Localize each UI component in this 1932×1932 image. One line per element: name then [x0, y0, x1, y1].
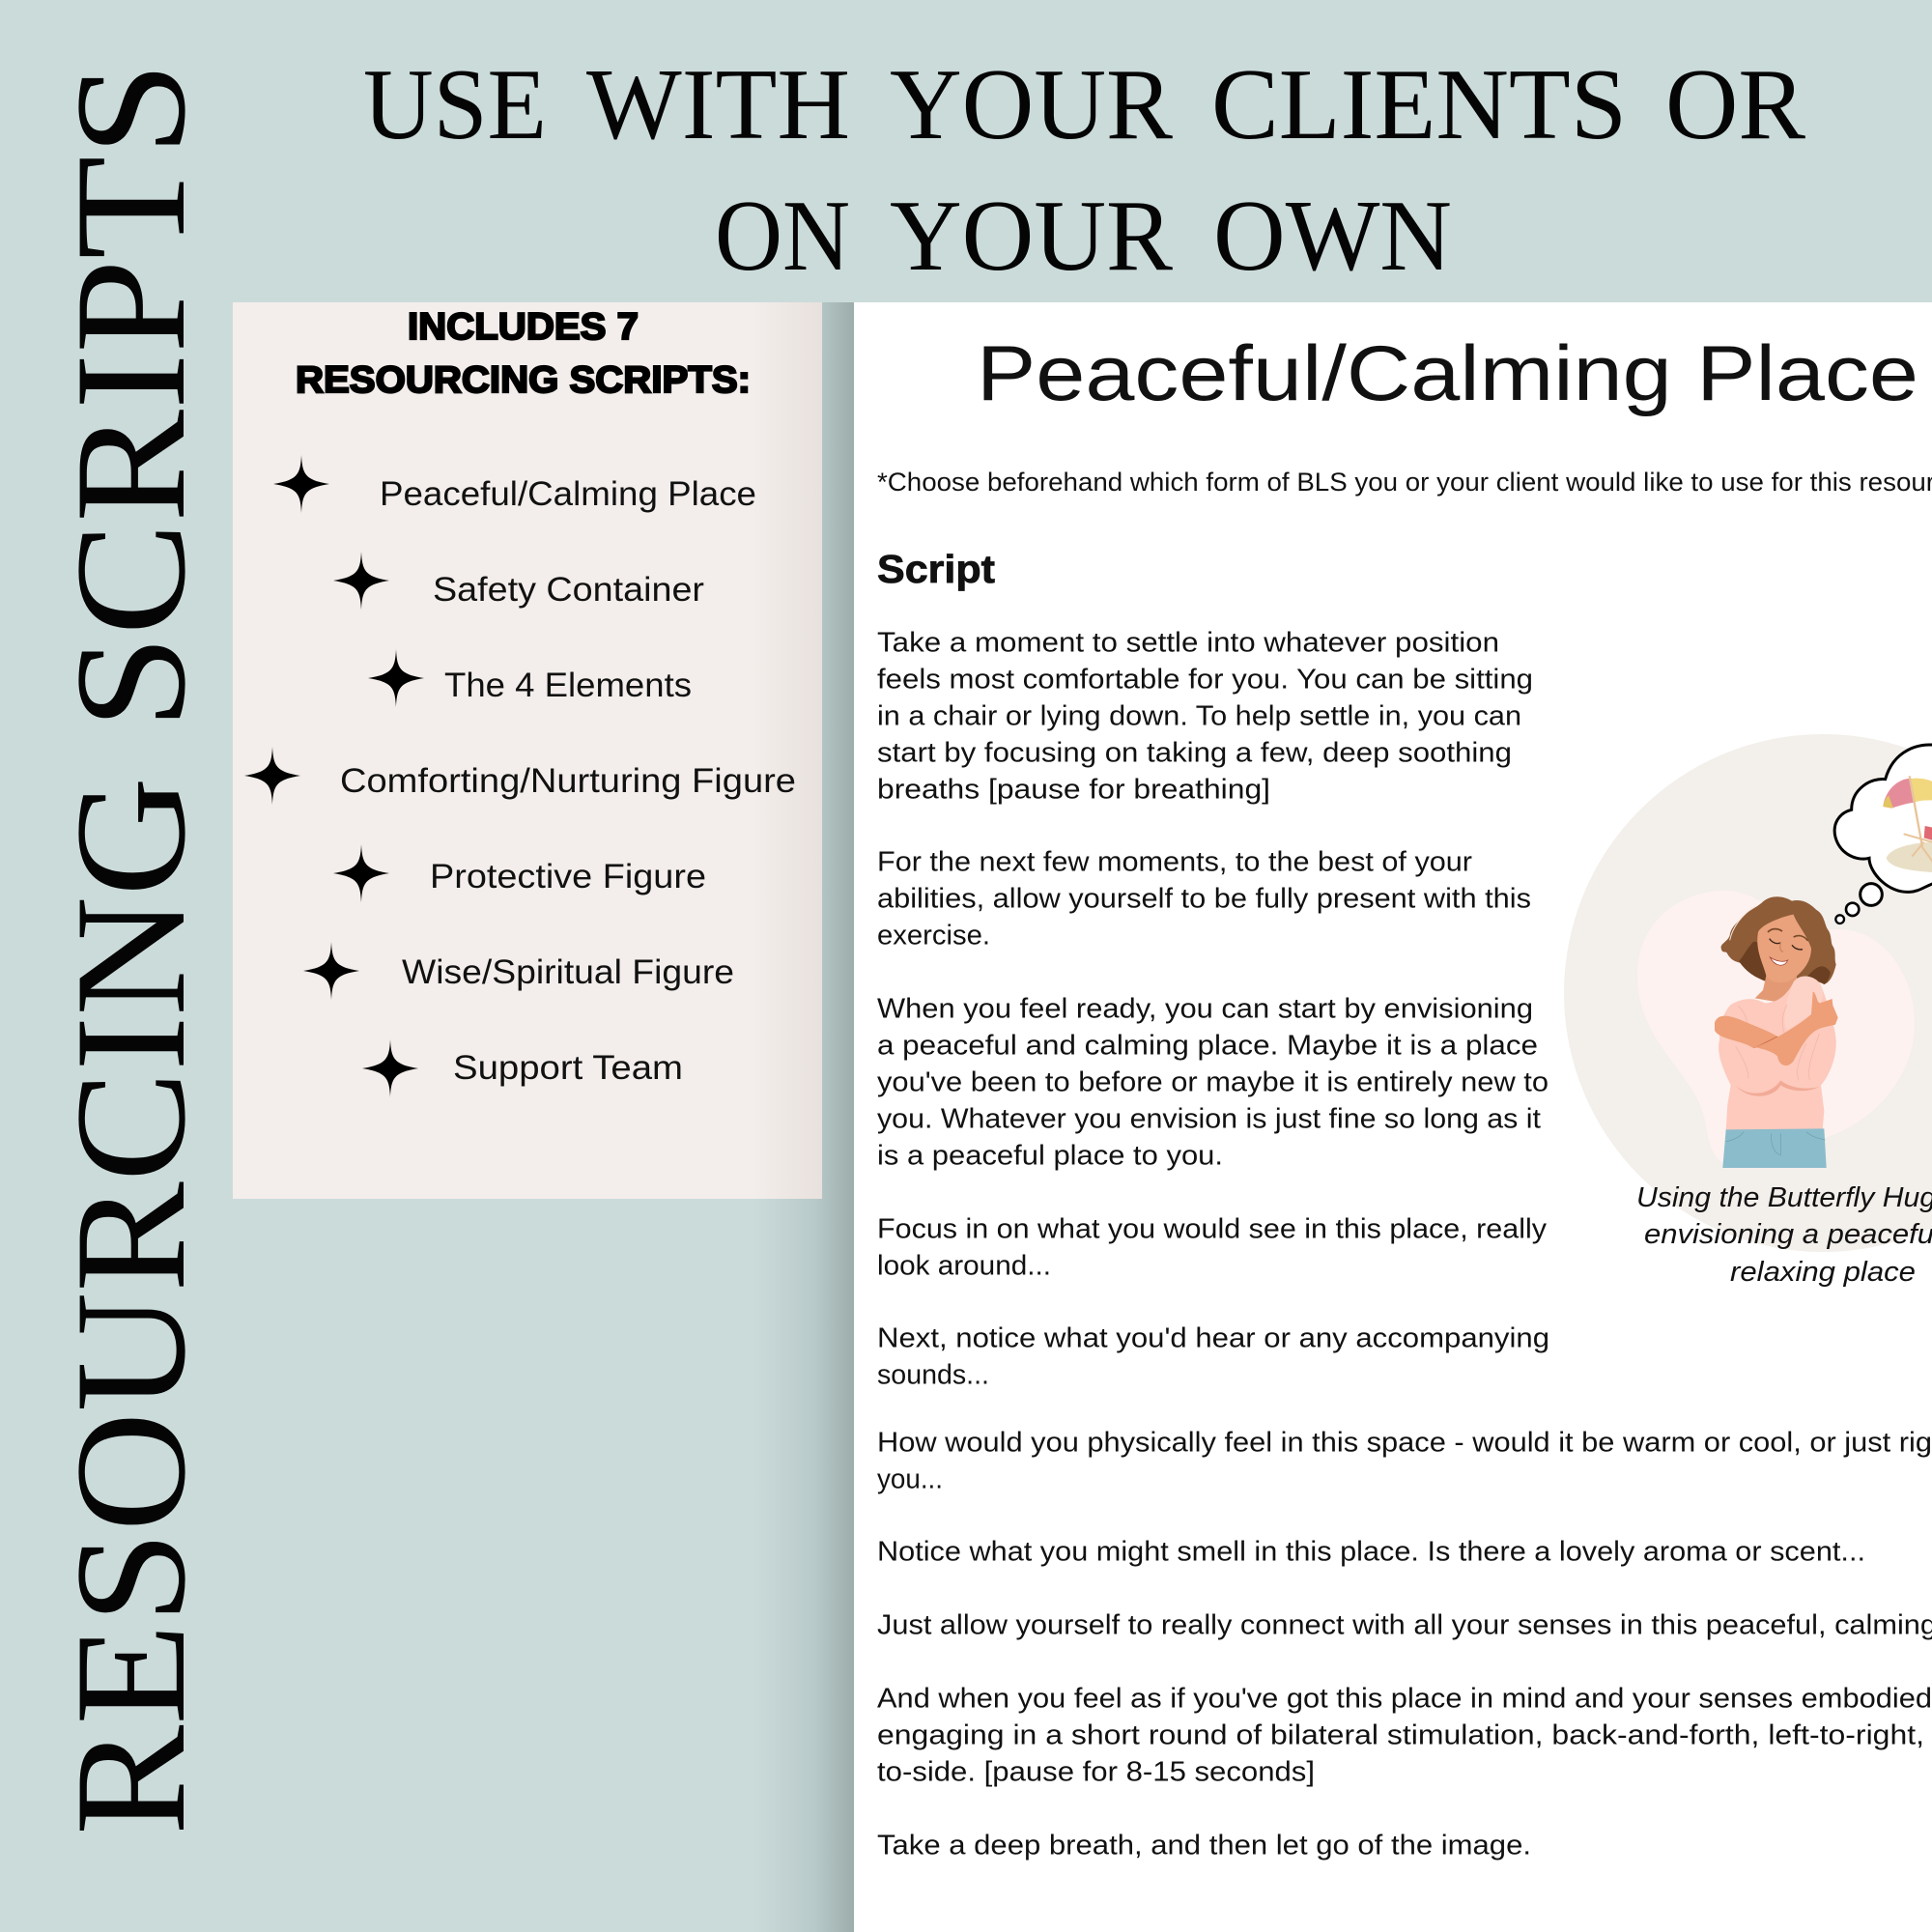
script text: you've been to before or maybe it is entirely new to [877, 1066, 1548, 1097]
script text: start by focusing on taking a few, deep soothing [877, 737, 1512, 768]
script text: in a chair or lying down. To help settle in, you can [877, 700, 1521, 731]
panel heading [296, 306, 751, 401]
backdrop circle [1564, 734, 1932, 1252]
pink blob [1637, 891, 1915, 1167]
script heading: Script [877, 547, 995, 591]
script text: you... [877, 1463, 943, 1494]
woman hugging herself [1715, 896, 1838, 1168]
panel heading: RESOURCING SCRIPTS: [296, 359, 751, 401]
script text: to-side. [pause for 8-15 seconds] [877, 1756, 1315, 1787]
script text: Focus in on what you would see in this place, really [877, 1213, 1548, 1244]
image caption: Using the Butterfly Hug [1636, 1182, 1932, 1213]
list of scripts: Safety Container [433, 571, 704, 609]
headline: YOUR [890, 47, 1173, 160]
script text [877, 627, 1932, 1861]
list of scripts: The 4 Elements [444, 667, 692, 704]
script text: abilities, allow yourself to be fully present with this [877, 883, 1531, 914]
list of scripts: Peaceful/Calming Place [380, 475, 756, 513]
list of scripts [244, 455, 796, 1097]
script text: look around... [877, 1250, 1051, 1281]
icon: star 2 [333, 552, 389, 610]
image caption: envisioning a peacefu [1644, 1219, 1932, 1250]
list of scripts: Protective Figure [430, 858, 706, 895]
script text: Next, notice what you'd hear or any accompanying [877, 1322, 1549, 1353]
headline: CLIENTS [1211, 47, 1627, 160]
list of scripts: Comforting/Nurturing Figure [340, 762, 796, 800]
script text: How would you physically feel in this space - would it be warm or cool, or just rig [877, 1427, 1932, 1458]
headline: WITH [586, 47, 850, 160]
headline: ON [715, 179, 850, 292]
script text: a peaceful and calming place. Maybe it is a place [877, 1030, 1538, 1061]
page drop shadow [753, 302, 854, 1932]
panel: includes 7 resourcing scripts [233, 302, 822, 1199]
headline: OWN [1213, 179, 1452, 292]
headline: USE [363, 47, 547, 160]
icon: star 4 [244, 747, 300, 805]
script text: engaging in a short round of bilateral stimulation, back-and-forth, left-to-right, [877, 1719, 1924, 1750]
icon: star 7 [362, 1039, 418, 1097]
script text: sounds... [877, 1359, 989, 1390]
panel heading: INCLUDES 7 [408, 306, 639, 348]
script text: is a peaceful place to you. [877, 1140, 1223, 1171]
headline: YOUR [890, 179, 1173, 292]
instruction note: *Choose beforehand which form of BLS you or your client would like to use for this resour [877, 468, 1932, 497]
script text: Take a deep breath, and then let go of the image. [877, 1830, 1531, 1861]
icon: star 6 [303, 942, 359, 1000]
script text: exercise. [877, 920, 990, 951]
script text: Just allow yourself to really connect with all your senses in this peaceful, calming [877, 1609, 1932, 1640]
list of scripts: Wise/Spiritual Figure [402, 953, 734, 991]
thought bubble [1834, 745, 1932, 923]
vertical title [43, 62, 218, 1835]
script text: Notice what you might smell in this place. Is there a lovely aroma or scent... [877, 1536, 1865, 1567]
icon: star 3 [368, 649, 424, 707]
list of scripts: Support Team [453, 1049, 683, 1087]
script text: Take a moment to settle into whatever position [877, 627, 1499, 658]
image caption [1636, 1182, 1932, 1288]
script text: When you feel ready, you can start by envisioning [877, 993, 1533, 1024]
script text: And when you feel as if you've got this place in mind and your senses embodied [877, 1683, 1932, 1714]
page title: Peaceful/Calming Place [977, 330, 1918, 417]
vertical title: RESOURCING [43, 777, 218, 1835]
headline: OR [1665, 47, 1805, 160]
script text: For the next few moments, to the best of your [877, 846, 1472, 877]
icon: star 1 [273, 455, 329, 513]
vertical title: SCRIPTS [43, 62, 218, 729]
icon: star 5 [333, 844, 389, 902]
panel: script page [854, 302, 1932, 1932]
headline [363, 47, 1805, 292]
script text: breaths [pause for breathing] [877, 774, 1270, 805]
illustration: butterfly hug [1564, 734, 1932, 1252]
script text: feels most comfortable for you. You can be sitting [877, 664, 1533, 695]
script text: you. Whatever you envision is just fine so long as it [877, 1103, 1541, 1134]
image caption: relaxing place [1730, 1257, 1916, 1288]
